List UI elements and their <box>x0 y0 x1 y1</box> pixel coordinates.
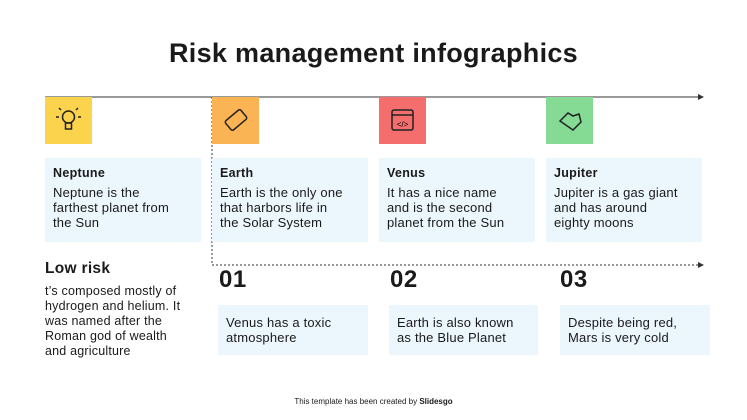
text: low risk description <box>45 284 180 358</box>
panel: Jupiter <box>546 158 702 242</box>
box 03: Mars is very cold <box>568 330 669 345</box>
box 02: as the Blue Planet <box>397 330 506 345</box>
number 02: 02 <box>390 266 418 293</box>
box 01: Venus has a toxic <box>226 315 331 330</box>
panel: Venus: and is the second <box>387 200 492 215</box>
panel: Venus: planet from the Sun <box>387 215 504 230</box>
panel: Venus: It has a nice name <box>387 185 497 200</box>
panel: Earth: the Solar System <box>220 215 322 230</box>
box 01: atmosphere <box>226 330 297 345</box>
panel: Jupiter: Jupiter is a gas giant <box>554 185 678 200</box>
icon: code window <box>379 97 426 144</box>
box 02: Earth is also known <box>397 315 514 330</box>
text: low risk description: was named after the <box>45 314 162 328</box>
panel: Jupiter: and has around <box>554 200 647 215</box>
panel: Venus <box>379 158 535 242</box>
panel: Venus: Venus <box>387 166 425 180</box>
panel: Earth: that harbors life in <box>220 200 327 215</box>
heading: low risk: Low risk <box>45 260 110 277</box>
panel: Earth: Earth <box>220 166 253 180</box>
icon: handshake <box>546 97 593 144</box>
panel: Jupiter: Jupiter <box>554 166 598 180</box>
box 03 <box>560 305 710 355</box>
text: low risk description: and agriculture <box>45 344 131 358</box>
icon: code window: </> <box>397 120 409 129</box>
footer: This template has been created by Slidesgo <box>294 397 453 406</box>
panel: Neptune: farthest planet from <box>53 200 169 215</box>
text: low risk description: t’s composed mostly of <box>45 284 176 298</box>
icon: seo tag <box>212 97 259 144</box>
number 01: 01 <box>219 266 247 293</box>
box 01 <box>218 305 368 355</box>
panel: Neptune: Neptune is the <box>53 185 140 200</box>
number 03: 03 <box>560 266 588 293</box>
text: low risk description: Roman god of wealth <box>45 329 167 343</box>
panel: Neptune <box>45 158 201 242</box>
panel: Jupiter: eighty moons <box>554 215 634 230</box>
box 03: Despite being red, <box>568 315 677 330</box>
panel: Neptune: the Sun <box>53 215 99 230</box>
box 02 <box>389 305 538 355</box>
panel: Neptune: Neptune <box>53 166 105 180</box>
panel: Earth: Earth is the only one <box>220 185 343 200</box>
text: low risk description: hydrogen and helium. It <box>45 299 180 313</box>
panel: Earth <box>212 158 368 242</box>
title: Risk management infographics <box>169 38 578 68</box>
icon: lightbulb <box>45 97 92 144</box>
